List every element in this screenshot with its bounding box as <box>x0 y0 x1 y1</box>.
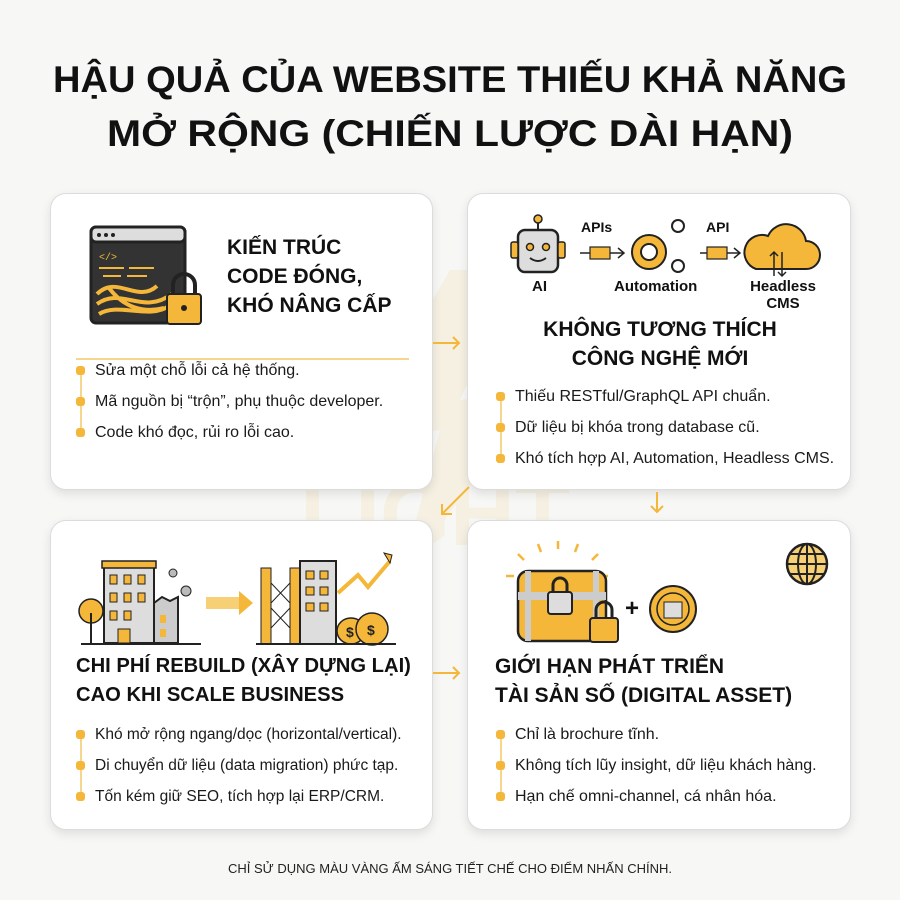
icon row: API <box>706 219 729 235</box>
icon: code window with lock: </> <box>99 252 117 264</box>
title <box>53 58 847 154</box>
arrow: diagonal <box>441 486 470 515</box>
icon row: Automation <box>614 278 697 295</box>
arrow: card2 down <box>650 492 664 514</box>
bullets: Khó mở rộng ngang/dọc (horizontal/vertical). <box>95 726 402 743</box>
heading <box>227 234 392 317</box>
icon: buildings <box>78 552 396 646</box>
title: HẬU QUẢ CỦA WEBSITE THIẾU KHẢ NĂNG <box>53 58 847 100</box>
bullets: Tốn kém giữ SEO, tích hợp lại ERP/CRM. <box>95 788 384 805</box>
bullets: Thiếu RESTful/GraphQL API chuẩn. <box>515 388 771 405</box>
bullets: Khó tích hợp AI, Automation, Headless CMS. <box>515 450 834 467</box>
footer note: CHỈ SỬ DỤNG MÀU VÀNG ẤM SÁNG TIẾT CHẾ CHO ĐIỂM NHẤN CHÍNH. <box>228 861 672 876</box>
heading: KHÔNG TƯƠNG THÍCH <box>543 318 777 341</box>
bullets <box>76 355 383 448</box>
bullets: Không tích lũy insight, dữ liệu khách hàng. <box>515 757 817 774</box>
icon row: AI <box>532 278 547 295</box>
heading: TÀI SẢN SỐ (DIGITAL ASSET) <box>495 684 792 707</box>
icon row: Headless <box>750 278 816 295</box>
panel: rebuild cost <box>50 520 433 830</box>
bullets: Code khó đọc, rủi ro lỗi cao. <box>95 424 294 441</box>
panel: digital asset <box>467 520 851 830</box>
bullets: Chỉ là brochure tĩnh. <box>515 726 659 743</box>
watermark: LIGHT <box>300 465 570 565</box>
arrow: card1 to card2 <box>433 336 460 350</box>
panel: code architecture <box>50 193 433 490</box>
icon: globe <box>786 542 828 586</box>
bullets: Sửa một chỗ lỗi cả hệ thống. <box>95 362 300 379</box>
panel: new technology <box>467 193 851 490</box>
heading: CHI PHÍ REBUILD (XÂY DỰNG LẠI) <box>76 655 411 677</box>
heading <box>495 654 792 707</box>
icon: code window with lock <box>90 226 202 325</box>
heading: GIỚI HẠN PHÁT TRIỂN <box>495 655 724 678</box>
bullets <box>496 719 817 812</box>
arrow: card3 to card4 <box>433 666 460 680</box>
bullets: Mã nguồn bị “trộn”, phụ thuộc developer. <box>95 393 383 410</box>
icon: locked chest plus coin <box>506 541 697 643</box>
icon: buildings: $ <box>367 622 375 638</box>
heading: KHÓ NÂNG CẤP <box>227 294 392 317</box>
heading: KIẾN TRÚC <box>227 236 341 259</box>
heading: CODE ĐÓNG, <box>227 265 362 288</box>
bullets: Di chuyển dữ liệu (data migration) phức tạp. <box>95 757 398 774</box>
bullets: Dữ liệu bị khóa trong database cũ. <box>515 419 760 436</box>
icon row <box>510 214 821 309</box>
icon: locked chest plus coin: + <box>625 595 639 622</box>
heading: CAO KHI SCALE BUSINESS <box>76 684 344 706</box>
title: MỞ RỘNG (CHIẾN LƯỢC DÀI HẠN) <box>107 112 793 154</box>
heading: CÔNG NGHỆ MỚI <box>572 347 748 370</box>
heading <box>76 654 411 706</box>
icon: buildings: $ <box>346 624 354 640</box>
icon row: APIs <box>581 219 612 235</box>
heading <box>543 316 777 370</box>
bullets <box>76 719 402 812</box>
bullets <box>496 381 834 474</box>
watermark <box>300 270 570 565</box>
bullets: Hạn chế omni-channel, cá nhân hóa. <box>515 788 777 805</box>
